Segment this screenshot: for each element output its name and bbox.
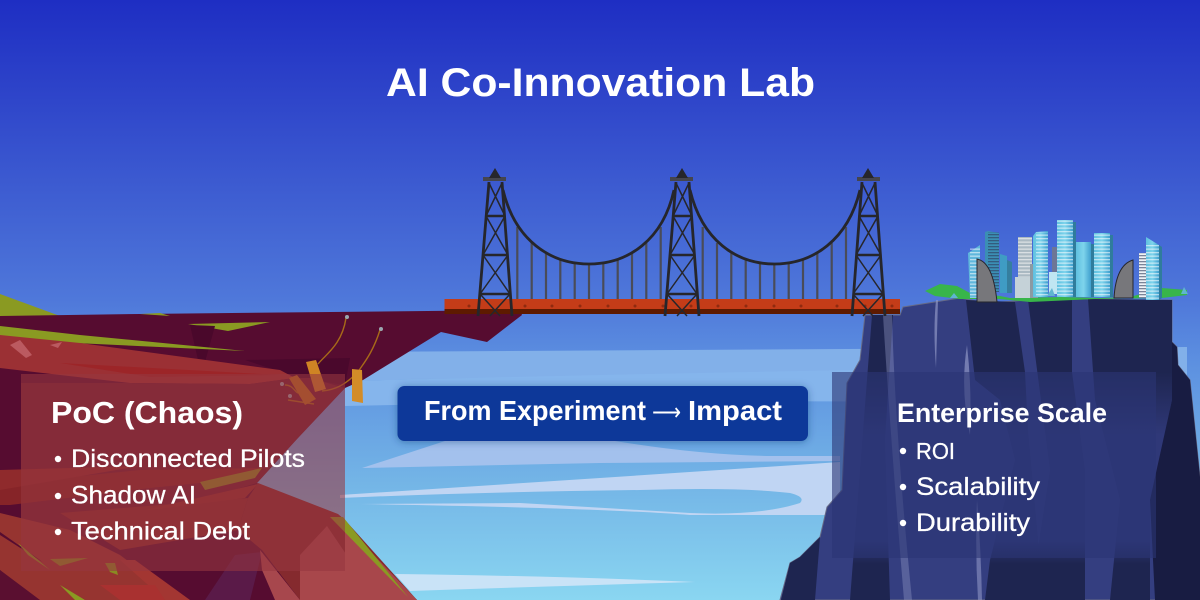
rock mass behind the panel [21,378,345,540]
grass [925,284,1187,302]
heading: PoC (Chaos): PoC (Chaos) [51,395,243,430]
callout: From Experiment to Impact: From Experiment [424,395,646,426]
tower 1 [478,168,512,316]
city skyline [925,220,1188,302]
callout: From Experiment to Impact: Impact [688,395,782,426]
list: PoC issues: Technical Debt [71,518,250,546]
panel: Enterprise Scale [832,372,1156,558]
list: PoC issues [55,445,305,546]
list: scale outcomes: Scalability [916,473,1041,501]
tower 3 [852,168,885,316]
callout: From Experiment to Impact [398,386,808,441]
right cliff [780,298,1200,600]
heading: Enterprise Scale: Enterprise Scale [897,398,1107,428]
tower 2 [665,168,699,316]
callout: From Experiment to Impact: ⟶ [652,398,681,426]
hangers [517,227,846,299]
bridge deck [444,299,900,314]
main cables [503,190,860,264]
list: PoC issues: Disconnected Pilots [71,445,305,473]
left cliff: broken rock [0,294,522,600]
clouds [340,347,1187,591]
list: PoC issues: Shadow AI [71,482,196,510]
title: AI Co-Innovation Lab [386,61,815,105]
list: scale outcomes: Durability [916,509,1031,537]
list: scale outcomes: ROI [916,438,955,464]
suspension bridge [444,168,900,316]
panel: PoC (Chaos) [21,374,345,571]
broken bridge planks and ropes [280,315,383,405]
list: scale outcomes [900,438,1041,537]
